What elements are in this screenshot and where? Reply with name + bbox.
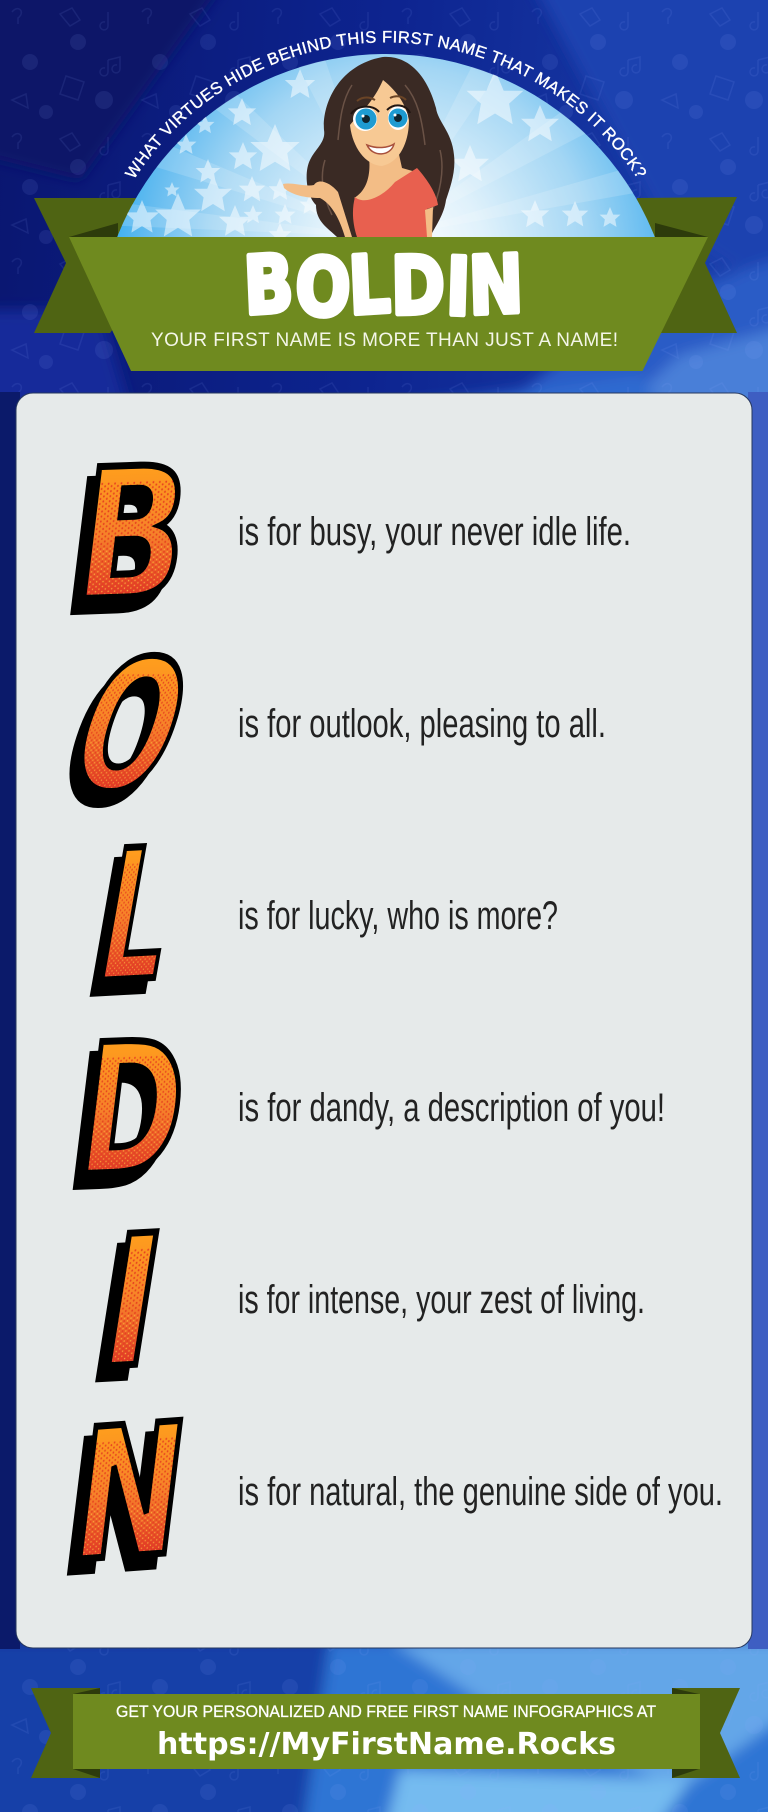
- footer ribbon: [31, 1688, 740, 1778]
- main ribbon: [69, 237, 708, 371]
- letter B: B: [65, 428, 200, 642]
- starburst dome: [117, 54, 655, 237]
- row: D: [69, 1002, 665, 1217]
- character: woman: [283, 57, 454, 237]
- eyes: [351, 96, 410, 131]
- footer url: https://MyFirstName.Rocks: [157, 1727, 616, 1762]
- arm and hand: [283, 181, 352, 237]
- face: [350, 80, 409, 166]
- row: N: [63, 1385, 723, 1603]
- hair: [307, 57, 454, 237]
- row: L: [85, 810, 558, 1025]
- letter L: L: [85, 810, 187, 1025]
- smile: [367, 144, 394, 154]
- curved headline: WHAT VIRTUES HIDE BEHIND THIS FIRST NAME THAT MAKES IT ROCK?: [124, 30, 646, 178]
- letter N: N: [63, 1385, 197, 1603]
- tagline: YOUR FIRST NAME IS MORE THAN JUST A NAME!: [151, 330, 618, 351]
- back ribbon tails: header: [34, 197, 737, 333]
- footer caption: GET YOUR PERSONALIZED AND FREE FIRST NAME INFOGRAPHICS AT: [116, 1702, 656, 1721]
- letter D: D: [69, 1002, 196, 1217]
- line L: is for lucky, who is more?: [238, 894, 558, 938]
- line B: is for busy, your never idle life.: [238, 510, 631, 554]
- footer band: [73, 1694, 700, 1769]
- row: O: [48, 622, 606, 832]
- letter O: O: [48, 622, 213, 832]
- footer tails: [31, 1688, 740, 1778]
- row: B: [65, 428, 631, 642]
- neck and chest: [354, 150, 416, 205]
- row: I: [88, 1195, 645, 1409]
- line O: is for outlook, pleasing to all.: [238, 702, 606, 746]
- shirt: [353, 168, 438, 237]
- panel: letters: [16, 393, 752, 1648]
- name title: BOLDIN: [241, 238, 525, 335]
- letter I: I: [88, 1195, 175, 1409]
